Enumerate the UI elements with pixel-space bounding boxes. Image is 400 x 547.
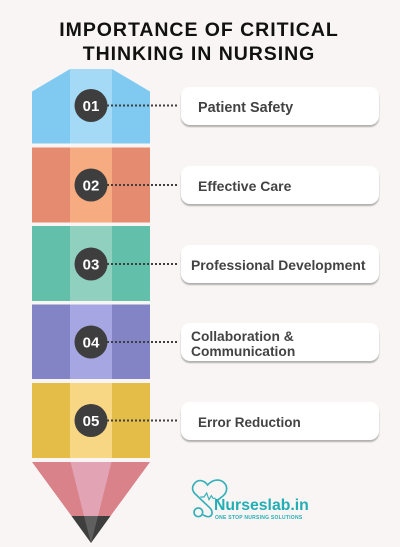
number badge 01 xyxy=(74,89,108,122)
logo tagline: ONE STOP NURSING SOLUTIONS xyxy=(215,515,302,521)
connector 4 xyxy=(107,341,178,343)
segment 2: orange xyxy=(32,148,150,222)
pencil tip xyxy=(32,462,150,543)
connector 2 xyxy=(107,184,178,186)
segment 5: yellow xyxy=(32,383,150,458)
card: Effective Care: Effective Care xyxy=(198,178,291,194)
number badge 02: 02 xyxy=(83,178,99,194)
card: Professional Development: Professional Development xyxy=(191,257,365,273)
title: THINKING IN NURSING xyxy=(83,43,315,65)
segment 1: blue pencil end xyxy=(32,69,150,144)
number badge 02 xyxy=(74,168,108,202)
icon: heart stethoscope xyxy=(192,479,228,518)
title xyxy=(59,19,339,65)
number badge 05 xyxy=(74,404,108,437)
connector 3 xyxy=(107,263,178,265)
segment 4: purple xyxy=(32,304,150,379)
card: Collaboration & Communication xyxy=(181,323,379,361)
card: Patient Safety: Patient Safety xyxy=(198,100,293,116)
card: Professional Development xyxy=(181,245,379,283)
number badge 04 xyxy=(74,326,108,358)
card: Error Reduction xyxy=(181,402,379,440)
number badge 04: 04 xyxy=(83,334,100,352)
segment 3: teal xyxy=(32,226,150,301)
connector 5 xyxy=(107,420,178,422)
card: Collaboration & Communication: Communication xyxy=(191,344,295,358)
card: Error Reduction: Error Reduction xyxy=(198,415,301,430)
number badge 03: 03 xyxy=(83,256,99,274)
logo wordmark: Nurseslab.in xyxy=(214,497,309,514)
number badge 01: 01 xyxy=(83,98,99,115)
connector 1 xyxy=(107,104,178,106)
number badge 05: 05 xyxy=(83,413,99,430)
logo: Nurseslab.in xyxy=(192,479,309,521)
number badge 03 xyxy=(74,248,108,280)
card: Patient Safety xyxy=(181,87,379,125)
title: IMPORTANCE OF CRITICAL xyxy=(59,19,339,41)
card: Collaboration & Communication: Collaboration & xyxy=(191,329,294,344)
card: Effective Care xyxy=(181,166,379,204)
